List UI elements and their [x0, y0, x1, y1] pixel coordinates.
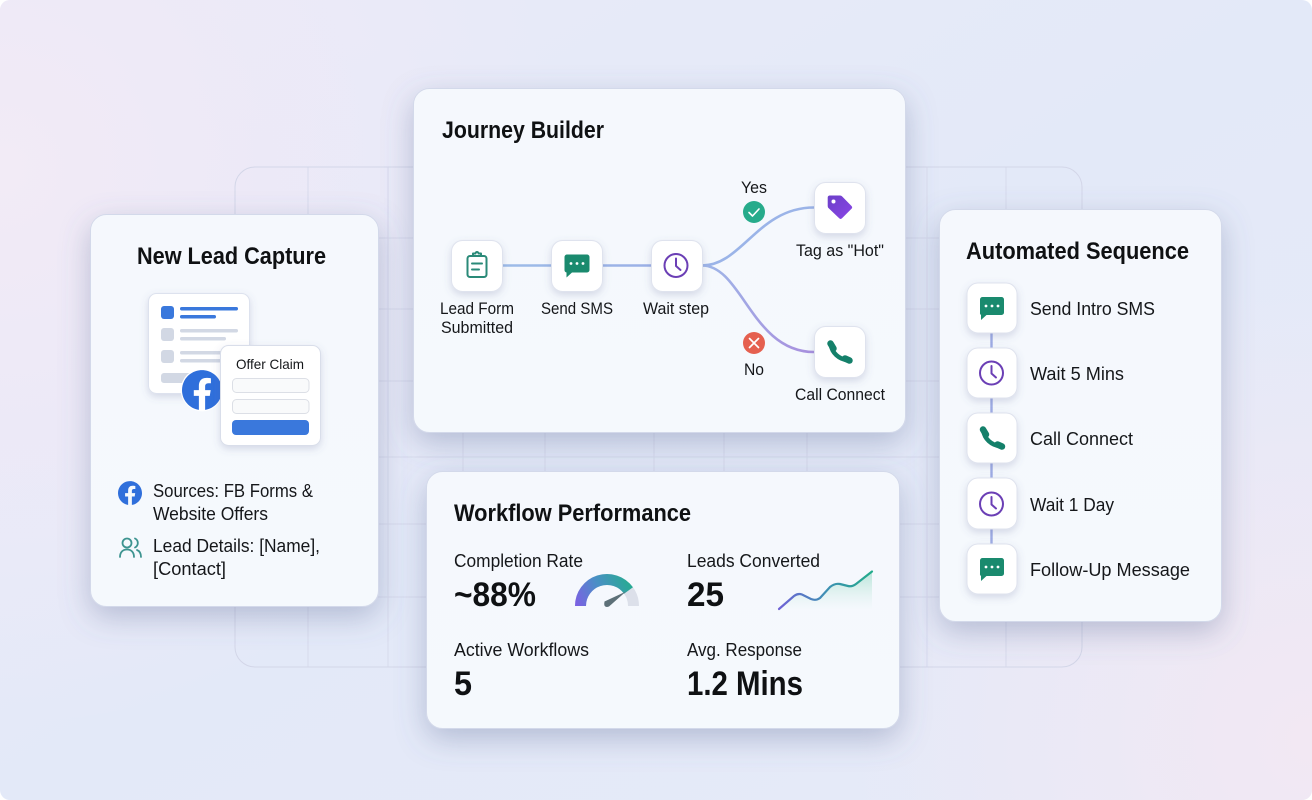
step: send intro sms: Send Intro SMS: [1030, 299, 1155, 319]
step: wait 1 day: Wait 1 Day: [1030, 495, 1114, 515]
step: call connect: Call Connect: [1030, 429, 1133, 449]
icon: chat: [980, 558, 1004, 581]
illustration: forms: Offer Claim: [236, 356, 304, 372]
step: wait 5 mins: [967, 348, 1124, 398]
heading: workflow performance: Workflow Performance: [454, 500, 691, 527]
node: call connect: Call Connect: [795, 385, 885, 404]
node: lead form submitted: [440, 240, 514, 337]
background grid: [235, 167, 1082, 667]
text: lead details: [153, 536, 320, 579]
text: sources: Sources: FB Forms &: [153, 481, 313, 501]
node: send sms: [541, 240, 613, 318]
metric: average response: 1.2 Mins: [687, 665, 803, 703]
panel: journey builder: [414, 88, 906, 432]
text: sources: Website Offers: [153, 504, 268, 524]
metric: leads converted: Leads Converted: [687, 551, 820, 571]
metric: active workflows: Active Workflows: [454, 640, 589, 660]
icon: phone: [830, 344, 850, 360]
heading: journey builder: Journey Builder: [442, 117, 604, 144]
text: lead details: Lead Details: [Name],: [153, 536, 320, 556]
branch: yes: Yes: [741, 178, 767, 197]
sparkline: [779, 572, 872, 610]
node: call connect: [795, 326, 885, 404]
branch: yes: [741, 178, 767, 223]
icon: facebook: [118, 481, 142, 505]
icon: facebook badge: [181, 369, 223, 411]
metric: completion rate: [454, 551, 583, 614]
icon: clock: [980, 362, 1003, 384]
icon: clipboard: [468, 252, 486, 277]
step: wait 5 mins: Wait 5 Mins: [1030, 364, 1124, 384]
icon: people: [120, 538, 141, 557]
sequence connector: [990, 333, 993, 544]
branch: no: No: [744, 360, 764, 379]
metric: leads converted: 25: [687, 576, 724, 614]
text: lead details: [Contact]: [153, 559, 226, 579]
metric: average response: Avg. Response: [687, 640, 802, 660]
metric: leads converted: [687, 551, 820, 614]
heading: new lead capture: New Lead Capture: [137, 243, 326, 270]
icon: chat: [564, 254, 590, 278]
metric: active workflows: 5: [454, 665, 472, 703]
node: lead form submitted: Lead Form: [440, 299, 514, 318]
step: send intro sms: [967, 283, 1155, 333]
icon: clock: [664, 254, 688, 277]
node: wait step: Wait step: [643, 299, 709, 318]
panel: new lead capture: [90, 214, 378, 606]
heading: automated sequence: Automated Sequence: [966, 238, 1189, 265]
node: tag as hot: [796, 182, 884, 260]
panel: workflow performance: [426, 472, 900, 728]
metric: completion rate: ~88%: [454, 576, 536, 614]
icon: chat: [980, 297, 1004, 320]
node: wait step: [643, 240, 709, 318]
gauge: [580, 579, 634, 607]
connectors: [503, 208, 814, 352]
metric: completion rate: Completion Rate: [454, 551, 583, 571]
text: sources: [153, 481, 313, 524]
metric: average response: [687, 640, 803, 703]
icon: tag: [828, 195, 852, 219]
step: wait 1 day: [967, 478, 1114, 529]
step: follow-up message: Follow-Up Message: [1030, 560, 1190, 580]
icon: phone: [983, 430, 1002, 446]
node: tag as hot: Tag as "Hot": [796, 241, 884, 260]
step: follow-up message: [967, 544, 1190, 594]
step: call connect: [967, 413, 1133, 463]
branch: no: [743, 332, 765, 379]
node: lead form submitted: Submitted: [441, 318, 513, 337]
icon: clock: [980, 492, 1003, 516]
illustration: forms: [148, 294, 320, 446]
metric: active workflows: [454, 640, 589, 703]
panel: automated sequence: [940, 210, 1222, 622]
node: send sms: Send SMS: [541, 299, 613, 318]
